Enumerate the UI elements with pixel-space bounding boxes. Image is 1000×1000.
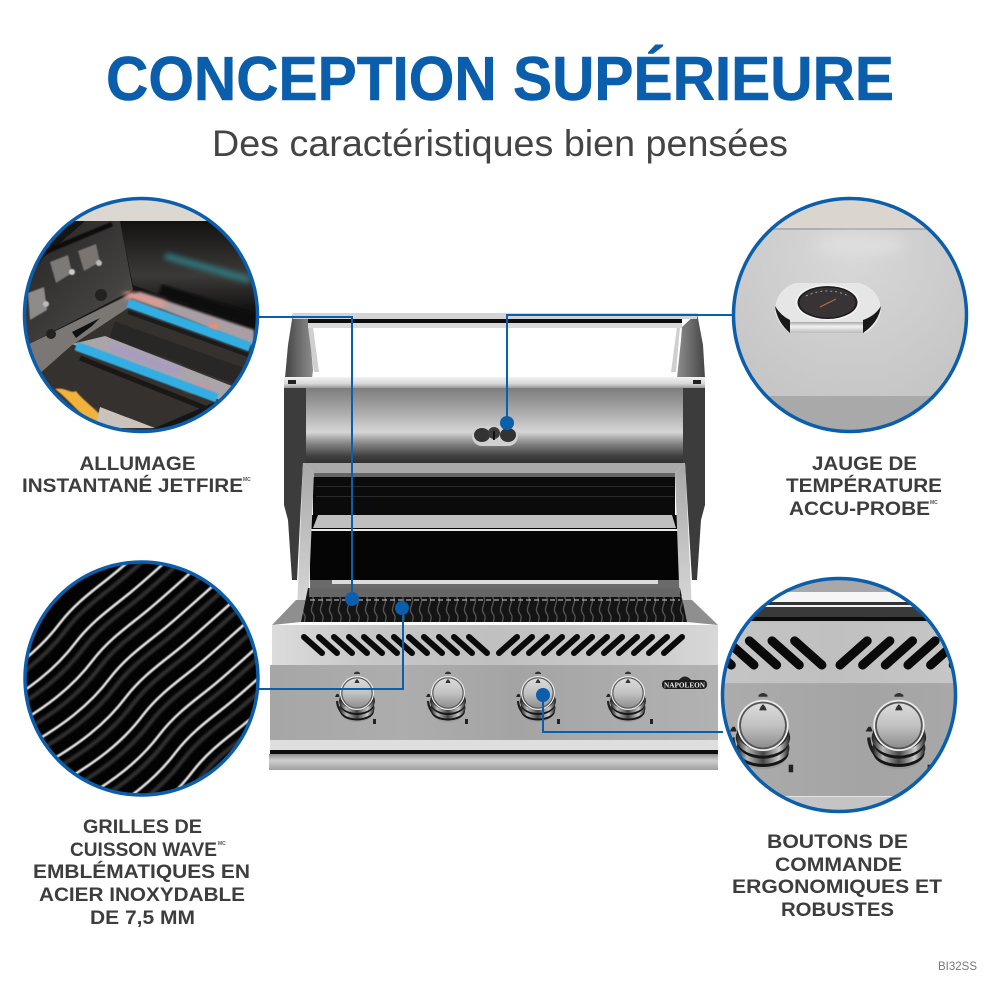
callout: knobs line — [536, 688, 723, 732]
circle: wave cooking grates photo — [23, 560, 260, 797]
circle: control knobs close-up — [720, 576, 958, 814]
model number: BI32SS — [938, 959, 977, 973]
product illustration: built-in grill — [269, 313, 718, 770]
label: ergonomic knobs: ERGONOMIQUES ET — [732, 876, 942, 898]
label: Wave cooking grids: MC — [218, 841, 226, 847]
label: JetFire ignition — [22, 453, 251, 497]
title: CONCEPTION SUPÉRIEURE — [106, 45, 894, 114]
circle: temperature gauge photo — [730, 195, 970, 436]
callout: JetFire line — [258, 317, 359, 606]
label: JetFire ignition: MC — [243, 477, 251, 483]
label: JetFire ignition: ALLUMAGE — [80, 453, 196, 475]
label: Accu-Probe gauge: JAUGE DE — [812, 453, 917, 475]
opened hood interior — [297, 463, 692, 610]
grill front with burner knobs — [269, 625, 718, 770]
label: JetFire ignition: INSTANTANÉ JETFIRE — [22, 474, 243, 497]
label: ergonomic knobs: BOUTONS DE — [767, 831, 908, 853]
label: Accu-Probe gauge — [786, 453, 942, 520]
grill lid with handle — [284, 313, 705, 580]
label: ergonomic knobs: COMMANDE — [775, 854, 902, 876]
circle: JetFire burners photo — [20, 195, 265, 435]
label: Accu-Probe gauge: TEMPÉRATURE — [786, 474, 942, 497]
cooking grates — [272, 588, 718, 625]
Napoleon logo: NAPOLEON — [664, 681, 705, 689]
label: Wave cooking grids — [33, 816, 250, 929]
label: ergonomic knobs — [732, 831, 942, 921]
callout: gauge line — [500, 315, 733, 430]
label: Wave cooking grids: EMBLÉMATIQUES EN — [33, 860, 250, 883]
Napoleon logo — [662, 676, 707, 689]
callout: grates line — [259, 601, 409, 689]
subtitle: Des caractéristiques bien pensées — [212, 123, 788, 164]
label: Wave cooking grids: DE 7,5 MM — [90, 907, 195, 929]
label: Wave cooking grids: CUISSON WAVE — [70, 839, 217, 861]
label: Wave cooking grids: ACIER INOXYDABLE — [39, 884, 245, 906]
label: Accu-Probe gauge: ACCU-PROBE — [789, 498, 930, 520]
label: Wave cooking grids: GRILLES DE — [83, 816, 202, 838]
label: ergonomic knobs: ROBUSTES — [781, 899, 894, 921]
temperature gauge on lid — [472, 426, 518, 446]
label: Accu-Probe gauge: MC — [930, 500, 938, 506]
